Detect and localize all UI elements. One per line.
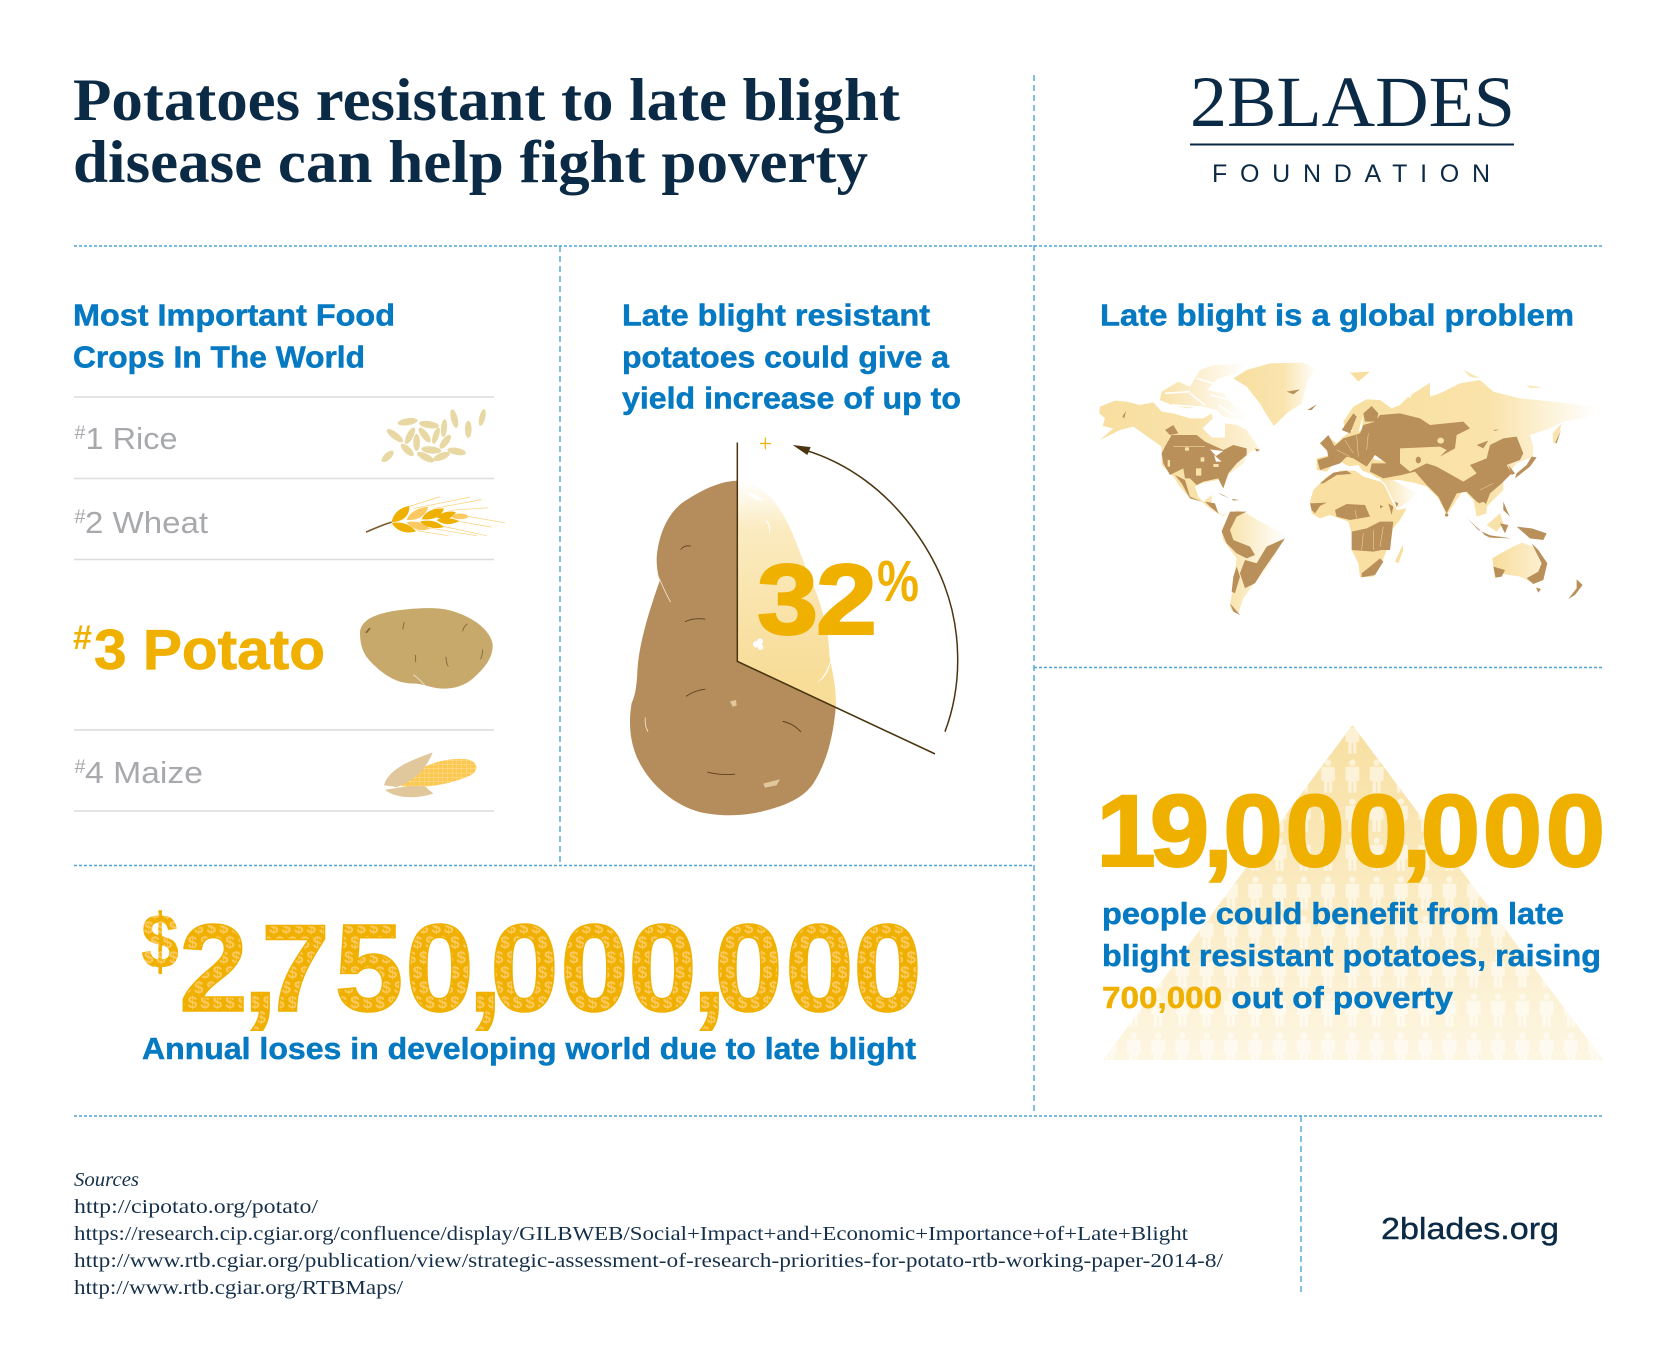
rank 3 potato label: 3 Potato xyxy=(94,618,325,682)
stat: 32 percent: % xyxy=(877,549,919,614)
rank 1 rice label: # xyxy=(74,423,86,444)
heading: global problem: Late blight is a global problem xyxy=(1100,298,1574,332)
map: Americas xyxy=(1099,363,1317,616)
text: people could benefit: blight resistant potatoes, raising xyxy=(1102,938,1601,973)
heading: yield increase: Late blight resistant xyxy=(622,298,930,332)
heading: yield increase: potatoes could give a xyxy=(622,340,950,374)
illustration: potato with 32 percent wedge xyxy=(630,437,958,815)
heading: yield increase xyxy=(622,298,961,416)
caption: annual losses: Annual loses in developing world due to late blight xyxy=(142,1031,916,1066)
title: Potatoes resistant to late blight xyxy=(73,67,900,133)
icon: rice grains xyxy=(380,408,487,465)
heading: most important food crops: Most Important Food xyxy=(73,298,395,332)
sources: Sources xyxy=(74,1169,139,1191)
title: disease can help fight poverty xyxy=(73,129,868,195)
logo: 2Blades Foundation xyxy=(1190,62,1515,188)
rank 2 wheat label: # xyxy=(74,507,86,528)
sources xyxy=(74,1169,1224,1299)
rank 4 maize label: # xyxy=(74,757,86,778)
website: 2blades.org xyxy=(1381,1211,1559,1246)
rank 1 rice label: 1 Rice xyxy=(86,421,178,456)
icon: potato xyxy=(360,608,493,689)
stat: 32 percent: 32 xyxy=(757,545,877,656)
logo: 2Blades Foundation: FOUNDATION xyxy=(1212,160,1490,188)
pyramid of people xyxy=(1103,725,1603,1060)
heading: most important food crops xyxy=(73,298,395,374)
icon: maize xyxy=(384,752,476,797)
stat: 2.75 billion dollars: $ xyxy=(141,897,179,985)
rank 3 potato label: # xyxy=(73,619,92,657)
sources: http://cipotato.org/potato/ xyxy=(74,1196,319,1218)
heading: yield increase: yield increase of up to xyxy=(622,380,961,416)
heading: most important food crops: Crops In The World xyxy=(73,340,365,374)
panel: food crops ranking xyxy=(73,298,505,811)
panel: yield increase xyxy=(622,298,961,815)
world map of late blight occurrence xyxy=(1099,363,1597,616)
text: people could benefit xyxy=(1102,896,1601,1015)
map: Europe, Africa, Asia, Oceania xyxy=(1310,370,1597,599)
text: people could benefit: people could benefit from late xyxy=(1102,896,1564,931)
panel: annual losses xyxy=(141,897,922,1066)
sources: http://www.rtb.cgiar.org/publication/view/strategic-assessment-of-research-priorities-for-potato-rtb-working-paper-2014-8/ xyxy=(74,1250,1224,1272)
stat: 19,000,000: 19,000,000 xyxy=(1096,774,1605,888)
logo: 2Blades Foundation: 2BLADES xyxy=(1190,62,1515,142)
rank 2 wheat label: 2 Wheat xyxy=(85,505,208,540)
panel: global problem xyxy=(1099,298,1597,616)
stat: 2.75 billion dollars: 2,750,000,000 xyxy=(179,900,922,1038)
sources: http://www.rtb.cgiar.org/RTBMaps/ xyxy=(74,1277,404,1299)
panel: people benefiting xyxy=(1096,725,1605,1060)
rank 4 maize label: 4 Maize xyxy=(85,755,203,790)
sources: https://research.cip.cgiar.org/confluence/display/GILBWEB/Social+Impact+and+Economic+Importance+of+Late+Blight xyxy=(74,1223,1189,1245)
title xyxy=(73,67,900,195)
icon: wheat xyxy=(366,497,505,536)
text: people could benefit: 700,000 out of poverty xyxy=(1102,980,1454,1015)
